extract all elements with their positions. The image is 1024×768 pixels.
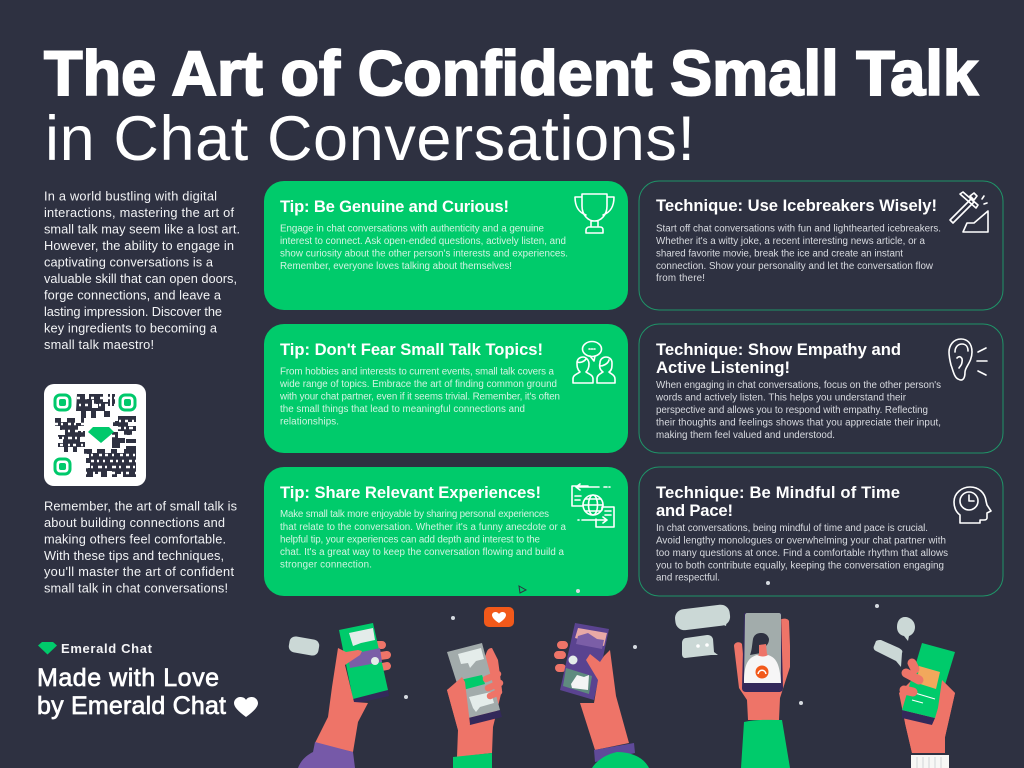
title: in Chat Conversations! — [45, 104, 695, 174]
title: The Art of Confident Small Talk — [44, 39, 979, 109]
panel: tip genuine: interest to connect. Ask open-ended questions, actively listen, and — [280, 236, 566, 247]
panel: technique icebreakers: from there! — [656, 273, 705, 284]
closing text: Remember, the art of small talk is — [44, 498, 237, 514]
panel: tip genuine: Remember, everyone loves talking about themselves! — [280, 261, 512, 272]
closing text: about building connections and — [44, 515, 225, 530]
panel: technique empathy: When engaging in chat conversations, focus on the other person's — [656, 380, 941, 391]
icon: ear — [949, 339, 987, 380]
panel: technique time: and Pace! — [656, 501, 733, 520]
footer tagline — [37, 664, 258, 720]
panel: tip experiences: that relate to the conversation. Whether it's a funny anecdote or a — [280, 522, 567, 533]
panel: technique time: Technique: Be Mindful of Time — [656, 483, 900, 502]
QR code — [44, 384, 146, 486]
panel: technique empathy — [639, 324, 1003, 453]
icon: two people talking — [573, 342, 615, 383]
panel: technique empathy: perspective and allows you to respond with empathy. Reflecting — [656, 405, 928, 416]
illustration: hand with gray phone — [447, 643, 502, 768]
intro text: However, the ability to engage in — [44, 238, 234, 253]
panel: technique time: Avoid lengthy monologues or overwhelming your chat partner with — [656, 536, 946, 546]
footer tagline: by Emerald Chat — [37, 692, 226, 720]
panel: tip experiences: Make small talk more enjoyable by sharing personal experiences — [280, 509, 549, 520]
panel: technique time: too many questions at once. Find a comfortable rhythm that allows — [656, 548, 948, 559]
panel: tip topics: the small things that lead to meaningful connections and — [280, 404, 525, 415]
closing text: With these tips and techniques, — [44, 548, 224, 563]
icon: ice pick — [950, 192, 988, 232]
closing text — [44, 498, 237, 596]
panel: technique time: In chat conversations, being mindful of time and pace is crucial. — [656, 523, 928, 534]
panel: tip experiences: stronger connection. — [280, 560, 372, 570]
illustration: hand with video call phone — [674, 604, 790, 768]
panel: technique time: and respectful. — [656, 572, 720, 584]
panel: tip topics: relationships. — [280, 416, 339, 428]
intro text: small talk may seem like a lost art. — [44, 222, 240, 236]
intro text: In a world bustling with digital — [44, 188, 217, 204]
intro text: captivating conversations is a — [44, 254, 214, 270]
panel: technique icebreakers: connection. Show your personality and let the conversation flow — [656, 261, 934, 272]
panel: tip genuine: Tip: Be Genuine and Curious! — [280, 197, 509, 216]
panel: tip experiences: helpful tip, your experiences can add depth and interest to the — [280, 534, 541, 546]
panel: technique icebreakers: Technique: Use Icebreakers Wisely! — [656, 196, 937, 215]
panel: technique icebreakers: Start off chat conversations with fun and lighthearted icebreakers. — [656, 224, 941, 234]
panel: technique icebreakers: shared favorite movie, break the ice and create an instant — [656, 248, 903, 260]
illustration: hand with purple phone — [558, 623, 649, 768]
panel: tip topics: From hobbies and interests to current events, small talk covers a — [280, 366, 555, 378]
illustration: hand with green envelope phone — [874, 617, 955, 768]
decorative dots — [404, 581, 879, 705]
panel: tip genuine: show curiosity about the other person's interests and experiences. — [280, 248, 568, 260]
intro text: key ingredients to becoming a — [44, 320, 218, 336]
panel: tip topics: wide range of topics. Embrace the art of finding common ground — [279, 379, 557, 390]
footer tagline: Made with Love — [37, 664, 219, 692]
intro text: small talk maestro! — [44, 337, 154, 352]
panel: tip experiences: chat. It's a great way to keep the conversation flowing and build a — [280, 547, 565, 558]
panel: technique icebreakers: Whether it's a witty joke, a recent interesting news article, or a — [656, 236, 926, 247]
closing text: you'll master the art of confident — [44, 564, 234, 579]
icon: trophy — [575, 194, 614, 233]
panel: tip genuine — [264, 181, 628, 310]
intro text: valuable skill that can open doors, — [44, 271, 237, 286]
panel: tip topics: with your chat partner, even if it seems trivial. Remember, it's often — [279, 392, 560, 402]
panel: technique empathy: their thoughts and feelings shows that you appreciate their input, — [656, 418, 941, 428]
closing text: small talk in chat conversations! — [44, 580, 228, 596]
footer logo: Emerald Chat — [61, 641, 153, 656]
closing text: making others feel comfortable. — [44, 532, 226, 546]
panel: technique empathy: Technique: Show Empathy and — [656, 340, 901, 359]
panel: tip experiences — [264, 467, 628, 596]
icon: head with clock — [954, 487, 991, 523]
intro text — [44, 188, 240, 352]
panel: technique empathy: Active Listening! — [656, 358, 790, 377]
illustration: hand with green phone — [288, 623, 389, 768]
intro text: forge connections, and leave a — [44, 288, 222, 302]
panel: technique icebreakers — [639, 181, 1003, 310]
title — [44, 39, 979, 174]
panel: technique time — [639, 467, 1003, 596]
panel: tip genuine: Engage in chat conversations with authenticity and a genuine — [280, 224, 545, 234]
panel: tip topics: Tip: Don't Fear Small Talk Topics! — [280, 340, 543, 359]
panel: tip experiences: Tip: Share Relevant Experiences! — [280, 483, 541, 502]
panel: technique empathy: making them feel valued and understood. — [656, 430, 835, 441]
icon: globe and documents — [572, 484, 614, 527]
panel: tip topics — [264, 324, 628, 453]
intro text: interactions, mastering the art of — [44, 205, 234, 220]
intro text: lasting impression. Discover the — [44, 304, 222, 319]
panel: technique empathy: words and actively listen. This helps you understand their — [655, 392, 907, 404]
panel: technique time: you to both contribute equally, keeping the conversation engaging — [656, 560, 944, 572]
icon: orange heart badge — [484, 607, 514, 627]
